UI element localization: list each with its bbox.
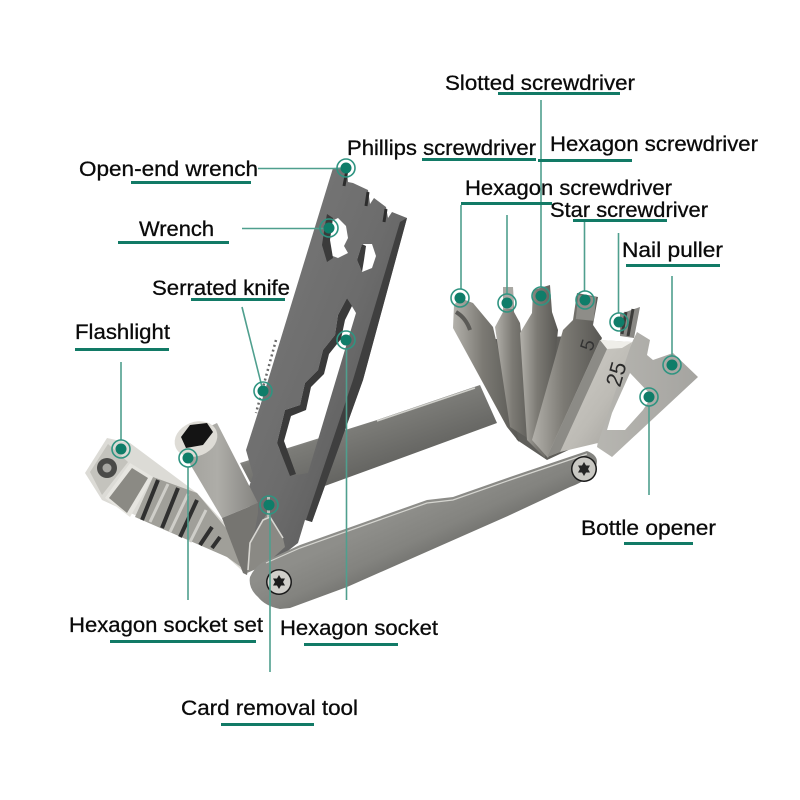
callout: card removal tool: Card removal tool — [181, 697, 358, 720]
fan blade: hex bit — [495, 287, 534, 442]
fan blade: slotted bit — [520, 285, 558, 458]
callout: wrench — [118, 218, 338, 244]
callout: star screwdriver — [550, 199, 708, 309]
lower handle bar — [250, 451, 597, 609]
screw: left pivot — [266, 569, 292, 595]
upper handle bar — [240, 385, 497, 495]
bottle opener and nail puller plate — [597, 332, 698, 457]
multi-tool illustration — [85, 167, 698, 609]
callout: hexagon socket: Hexagon socket — [280, 617, 438, 640]
callout: bottle opener: Bottle opener — [581, 517, 716, 540]
flashlight body with grip — [85, 438, 247, 575]
fan blade: hexagon bit with 5 mark — [532, 293, 602, 458]
star bit tip — [620, 307, 640, 338]
callout: open-end wrench — [79, 158, 355, 184]
callout: serrated knife — [152, 277, 290, 400]
callout: phillips screwdriver — [347, 137, 536, 307]
card removal tool — [247, 497, 285, 573]
fan blade: phillips bit — [453, 298, 519, 442]
callout: hexagon screwdriver (left) — [461, 177, 672, 312]
callout: slotted screwdriver — [445, 72, 635, 305]
fan blade: hexagon bit with 5 mark: 5 — [577, 337, 600, 354]
callout: slotted screwdriver: Slotted screwdriver — [445, 72, 635, 95]
callout: card removal tool — [181, 496, 358, 726]
callout: hexagon screwdriver (right): Hexagon screwdriver — [550, 133, 758, 156]
callout: flashlight: Flashlight — [75, 321, 170, 344]
hexagon socket tube — [169, 415, 258, 575]
screw: right pivot — [571, 456, 597, 482]
callout: star screwdriver: Star screwdriver — [550, 199, 708, 222]
callout: hexagon socket set: Hexagon socket set — [69, 614, 263, 637]
callout: hexagon screwdriver (left): Hexagon screwdriver — [465, 177, 672, 200]
fan backing between blades — [470, 335, 600, 460]
callout: hexagon screwdriver (right) — [538, 133, 758, 331]
callout: hexagon socket set — [69, 449, 263, 643]
callout: flashlight — [75, 321, 170, 458]
callout: phillips screwdriver: Phillips screwdriver — [347, 137, 536, 160]
wrench plate with teeth, holes and slot — [246, 167, 407, 570]
callout: nail puller: Nail puller — [622, 239, 723, 262]
callout: nail puller — [622, 239, 723, 374]
callout: wrench: Wrench — [139, 218, 214, 241]
callout: hexagon socket — [280, 331, 438, 646]
callout: bottle opener — [581, 388, 716, 545]
fan blade: 25 handle: 25 — [601, 359, 632, 389]
callout: serrated knife: Serrated knife — [152, 277, 290, 300]
fan blade: 25 handle — [547, 340, 632, 457]
callout: open-end wrench: Open-end wrench — [79, 158, 258, 181]
